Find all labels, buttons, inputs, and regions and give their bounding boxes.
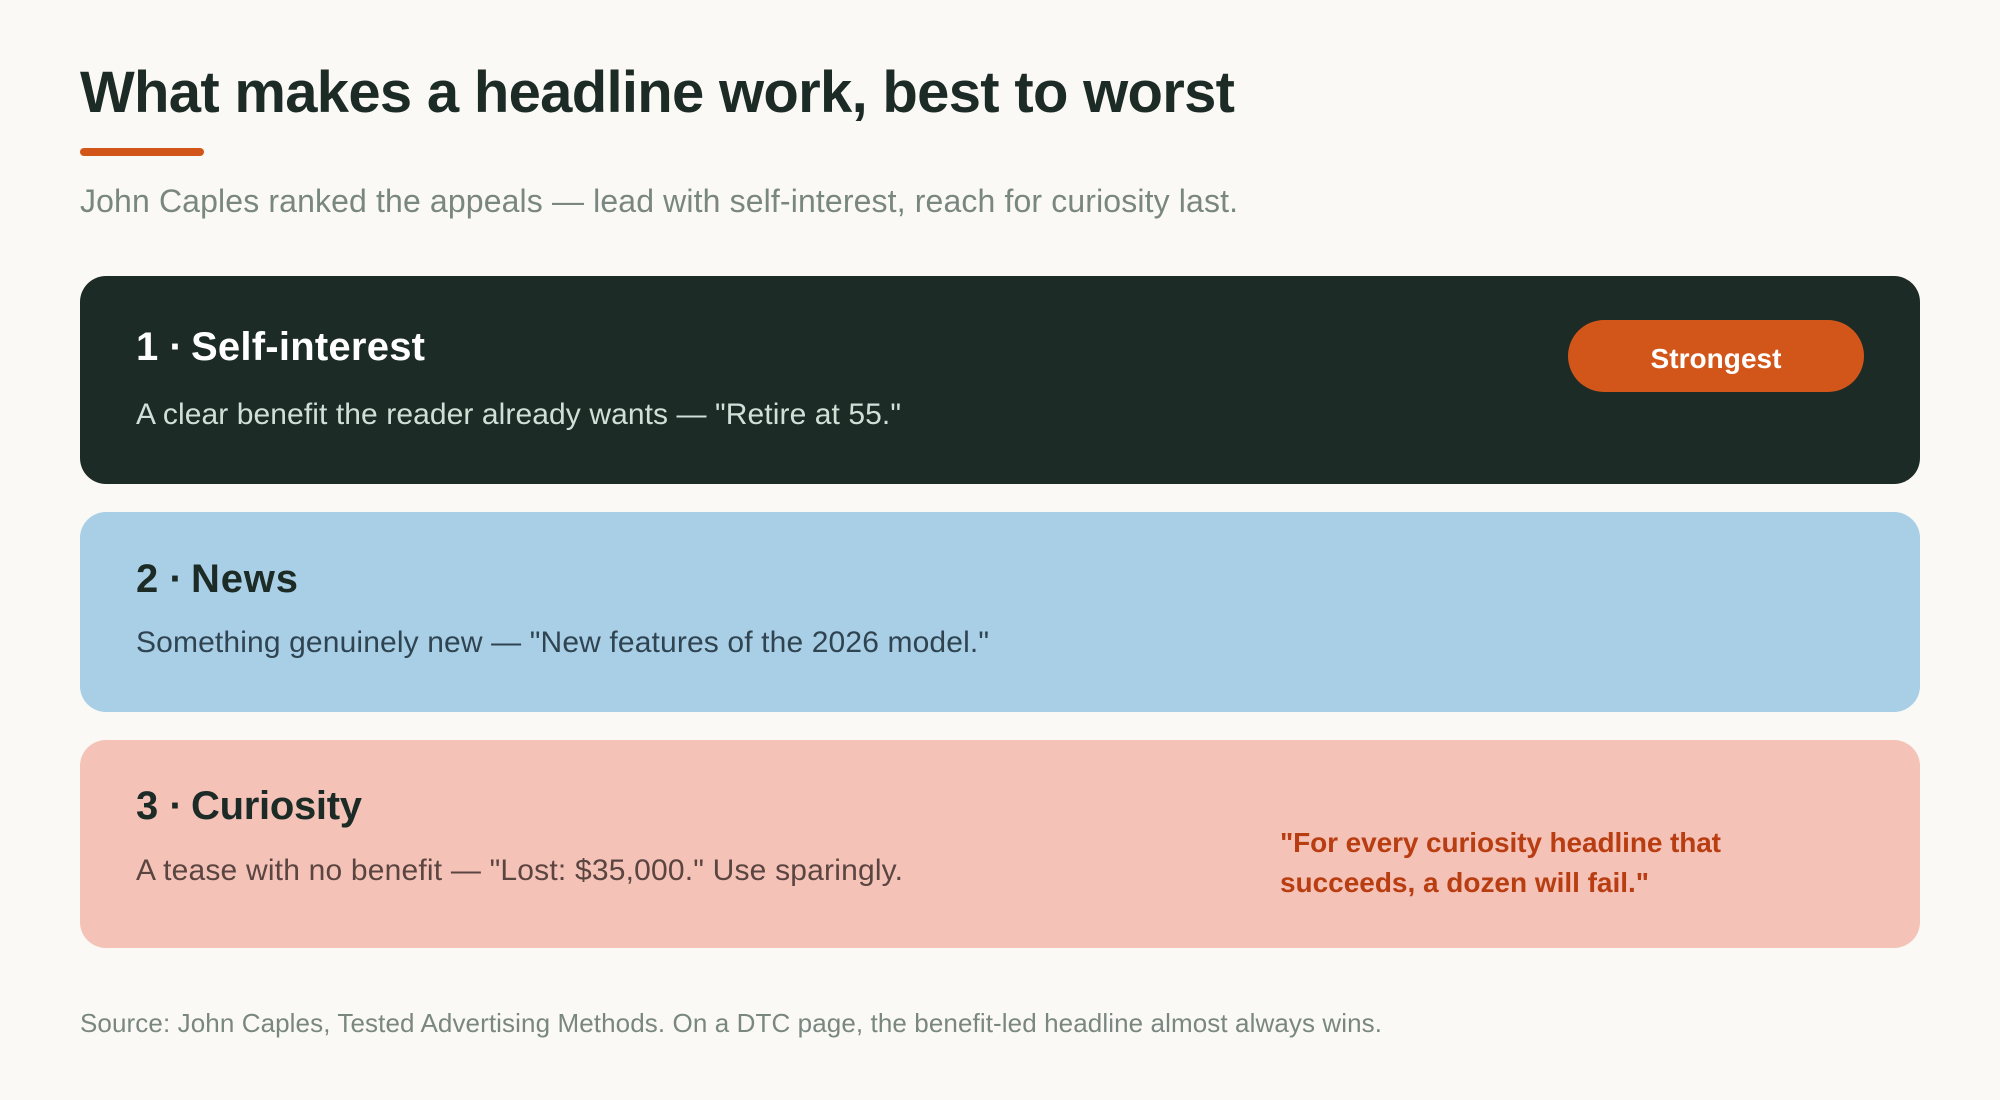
- card heading: news: News: [191, 557, 298, 601]
- card background: news: [80, 512, 1920, 712]
- card description: self-interest: A clear benefit the reader already wants — "Retire at 55.": [136, 398, 901, 431]
- title: What makes a headline work, best to worst: [80, 60, 1235, 125]
- card background: self-interest: [80, 276, 1920, 484]
- source note: Source: John Caples, Tested Advertising Methods. On a DTC page, the benefit-led headline almost always wins.: [80, 1008, 1382, 1038]
- panel: 3 curiosity: [80, 740, 1920, 948]
- panel: 2 news: [80, 512, 1920, 712]
- card heading: self-interest: 1 ·: [136, 325, 183, 369]
- card description: curiosity: A tease with no benefit — "Lost: $35,000." Use sparingly.: [136, 854, 903, 887]
- callout: quote: succeeds, a dozen will fail.": [1280, 867, 1649, 898]
- callout: quote: "For every curiosity headline that: [1280, 827, 1721, 858]
- card heading: curiosity: 3 ·: [136, 784, 183, 828]
- card background: curiosity: [80, 740, 1920, 948]
- subtitle: John Caples ranked the appeals — lead with self-interest, reach for curiosity last.: [80, 183, 1238, 219]
- card heading: self-interest: Self-interest: [191, 325, 425, 369]
- card heading: curiosity: Curiosity: [191, 784, 363, 828]
- card description: news: Something genuinely new — "New features of the 2026 model.": [136, 626, 989, 659]
- card heading: news: [136, 557, 298, 601]
- badge: strongest: [1568, 320, 1864, 392]
- panel: 1 self-interest: [80, 276, 1920, 484]
- callout: quote: [1280, 827, 1721, 898]
- badge: strongest: Strongest: [1650, 343, 1782, 374]
- title accent rule: [80, 148, 204, 156]
- card heading: news: 2 ·: [136, 557, 183, 601]
